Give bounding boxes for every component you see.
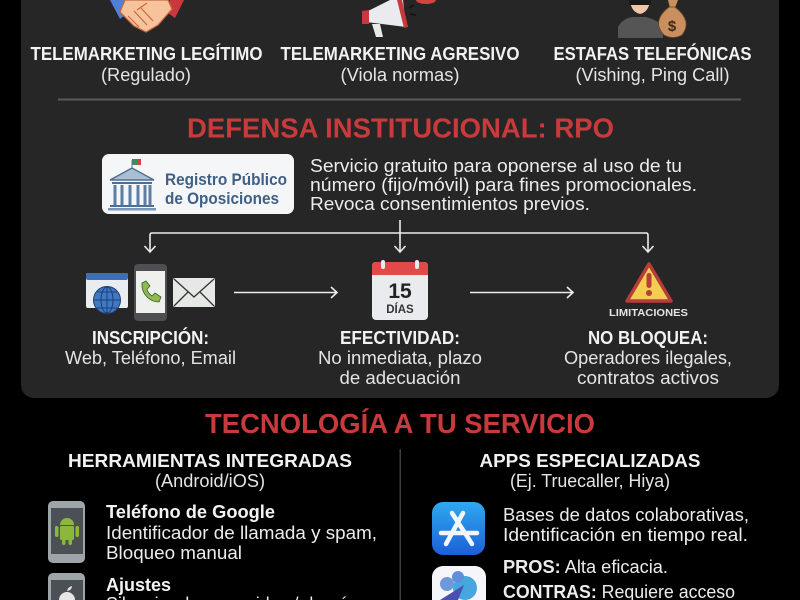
text: teléfono de google bbox=[106, 502, 377, 563]
text: inscripción: INSCRIPCIÓN: bbox=[92, 327, 209, 348]
heading: herramientas integradas: (Android/iOS) bbox=[155, 471, 265, 491]
icon: android phone bbox=[48, 501, 85, 563]
text: descripción del servicio bbox=[310, 156, 697, 214]
label: telemarketing legítimo: (Regulado) bbox=[101, 65, 191, 85]
icon: handshake bbox=[110, 0, 184, 32]
icon: warning limitaciones bbox=[609, 264, 688, 319]
text: descripción del servicio: Servicio gratuito para oponerse al uso de tu bbox=[310, 156, 682, 176]
text: descripción del servicio: Revoca consentimientos previos. bbox=[310, 194, 590, 214]
divider bbox=[400, 449, 401, 600]
heading: apps especializadas: APPS ESPECIALIZADAS bbox=[480, 451, 700, 471]
text: teléfono de google: Teléfono de Google bbox=[106, 502, 275, 522]
text: no bloquea bbox=[564, 328, 732, 388]
icon: scammer with money bag: $ bbox=[668, 18, 677, 35]
arrow: efectividad a limitaciones bbox=[470, 287, 573, 298]
column: herramientas integradas bbox=[48, 451, 377, 600]
text: descripción del servicio: número (fijo/móvil) para fines promocionales. bbox=[310, 175, 697, 195]
text: efectividad: No inmediata, plazo bbox=[318, 348, 482, 368]
icon: megaphone bbox=[362, 0, 436, 37]
label: telemarketing legítimo bbox=[30, 43, 262, 85]
icon: calendar 15 días: DÍAS bbox=[386, 303, 414, 316]
text: bases de datos: Bases de datos colaborativas, bbox=[503, 505, 749, 525]
label: telemarketing legítimo: TELEMARKETING LEGÍTIMO bbox=[30, 43, 262, 64]
text: efectividad: de adecuación bbox=[340, 368, 460, 388]
heading: apps especializadas: (Ej. Truecaller, Hiya) bbox=[510, 471, 670, 491]
arrows: ramificación hacia tres columnas bbox=[144, 220, 654, 252]
logo: registro público de oposiciones: Registro Público bbox=[165, 170, 287, 189]
text: no bloquea: Operadores ilegales, bbox=[564, 348, 732, 368]
panel: tipos y defensa institucional bbox=[21, 0, 779, 398]
heading: herramientas integradas bbox=[68, 451, 352, 491]
icon: calendar 15 días: 15 bbox=[388, 280, 412, 303]
icon: warning limitaciones: LIMITACIONES bbox=[609, 308, 688, 319]
text: no bloquea: contratos activos bbox=[577, 368, 719, 388]
icon: app colaborativa bbox=[432, 566, 486, 600]
label: estafas telefónicas bbox=[554, 43, 752, 85]
text: bases de datos: Identificación en tiempo real. bbox=[503, 525, 748, 545]
text: teléfono de google: Bloqueo manual bbox=[106, 543, 242, 563]
text: inscripción: Web, Teléfono, Email bbox=[65, 348, 236, 368]
label: estafas telefónicas: (Vishing, Ping Call) bbox=[576, 65, 730, 85]
column: apps especializadas bbox=[432, 451, 749, 600]
icon: calendar 15 días bbox=[372, 260, 428, 320]
icon: scammer with money bag bbox=[618, 0, 686, 38]
text: bases de datos bbox=[503, 505, 749, 545]
text: pros: PROS: Alta eficacia. bbox=[503, 557, 668, 577]
label: telemarketing agresivo: (Viola normas) bbox=[340, 65, 460, 85]
label: estafas telefónicas: ESTAFAS TELEFÓNICAS bbox=[554, 43, 752, 64]
logo: registro público de oposiciones: de Oposiciones bbox=[165, 189, 279, 208]
text: efectividad: EFECTIVIDAD: bbox=[340, 328, 460, 348]
label: telemarketing agresivo: TELEMARKETING AGRESIVO bbox=[280, 44, 520, 64]
heading: defensa institucional: DEFENSA INSTITUCIONAL: RPO bbox=[187, 112, 614, 144]
text: efectividad bbox=[318, 328, 482, 388]
text: no bloquea: NO BLOQUEA: bbox=[588, 328, 708, 348]
label: telemarketing agresivo bbox=[280, 44, 520, 85]
text: inscripción bbox=[65, 327, 236, 368]
text: ajustes: Ajustes bbox=[106, 575, 171, 595]
logo: registro público de oposiciones bbox=[102, 154, 294, 214]
text: teléfono de google: Identificador de llamada y spam, bbox=[106, 523, 377, 543]
icon: web, phone and email bbox=[86, 264, 215, 321]
arrow: inscripción a efectividad bbox=[234, 287, 337, 298]
heading: tecnología a tu servicio: TECNOLOGÍA A TU SERVICIO bbox=[205, 408, 595, 439]
icon: app store bbox=[432, 502, 485, 555]
heading: apps especializadas bbox=[480, 451, 700, 491]
heading: herramientas integradas: HERRAMIENTAS INTEGRADAS bbox=[68, 451, 352, 471]
text: ajustes bbox=[106, 575, 356, 600]
icon: apple phone bbox=[48, 573, 85, 600]
